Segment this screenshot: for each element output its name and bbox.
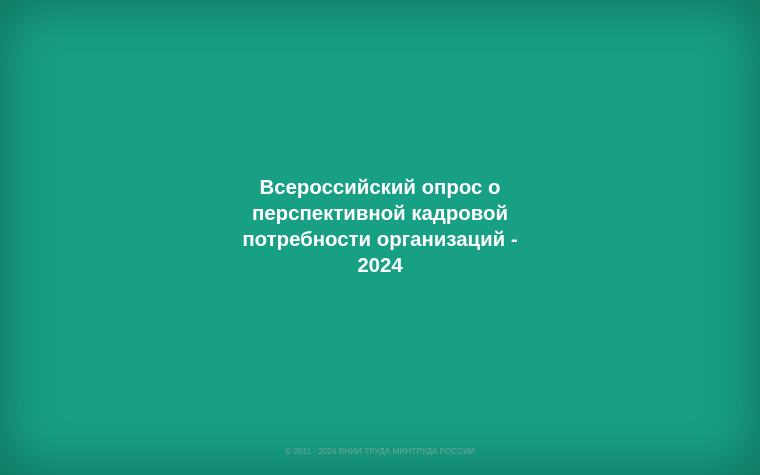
title: перспективной кадровой xyxy=(252,203,508,225)
title xyxy=(242,177,518,277)
title: Всероссийский опрос о xyxy=(260,177,500,199)
title: потребности организаций - xyxy=(242,229,518,251)
title: 2024 xyxy=(357,255,403,277)
footer copyright: © 2011 - 2024 ВНИИ ТРУДА МИНТРУДА РОССИИ xyxy=(285,447,475,456)
